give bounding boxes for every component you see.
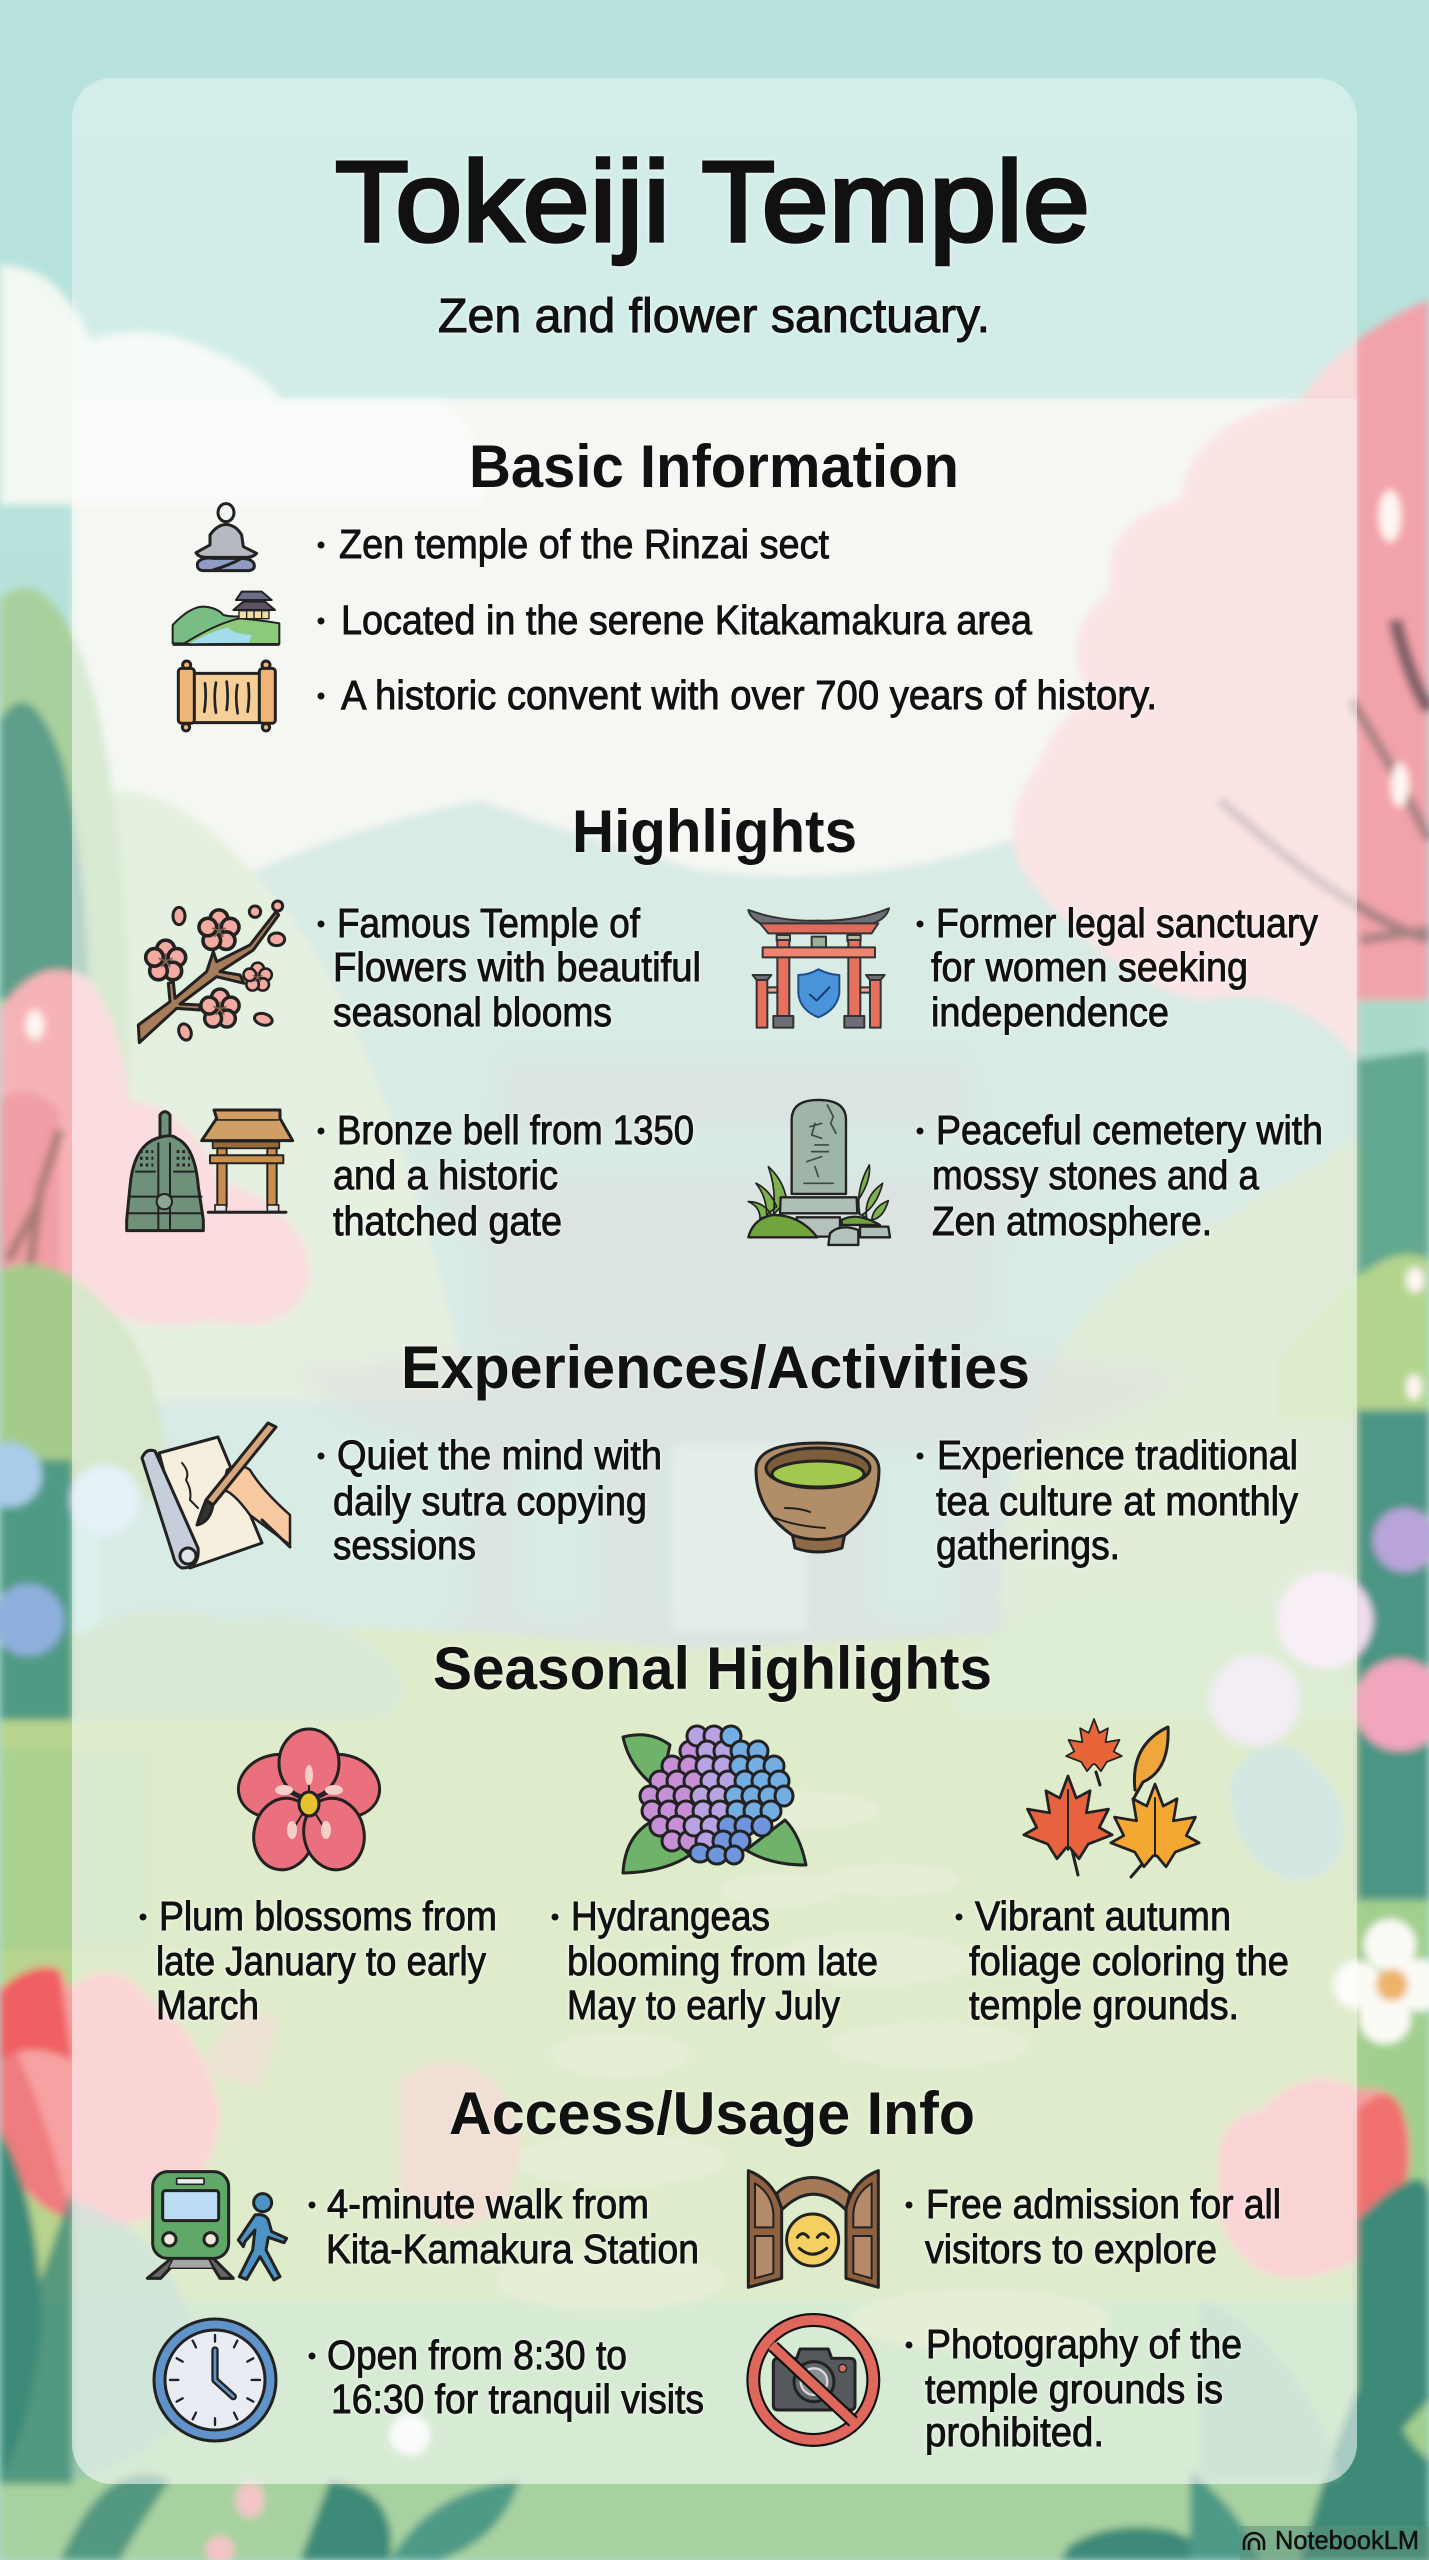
text: plum blossoms: late January to early (156, 1938, 486, 1984)
section: seasonal highlights (140, 1635, 1289, 2028)
icon: mossy gravestone (748, 1100, 890, 1245)
text: hydrangeas: Hydrangeas (571, 1893, 770, 1939)
text: autumn foliage: Vibrant autumn (975, 1893, 1231, 1939)
heading: access and usage info: Access/Usage Info (449, 2080, 975, 2147)
text: legal sanctuary: Former legal sanctuary (936, 900, 1318, 946)
heading: seasonal highlights: Seasonal Highlights (433, 1635, 992, 1702)
misty sky below the seam (72, 399, 1357, 1000)
text: temple of flowers: Famous Temple of (337, 900, 641, 946)
text: basic information bullets (318, 521, 1157, 718)
text: autumn foliage: foliage coloring the (969, 1938, 1289, 1984)
text: peaceful cemetery: mossy stones and a (932, 1152, 1259, 1198)
text: opening hours: 16:30 for tranquil visits (331, 2376, 704, 2422)
icon: hydrangea (623, 1726, 806, 1873)
text: free admission (906, 2181, 1281, 2272)
text: autumn foliage: temple grounds. (969, 1982, 1239, 2028)
pink blush inside panel (400, 2062, 520, 2226)
text: sutra copying: sessions (333, 1522, 476, 1568)
text: opening hours: Open from 8:30 to (327, 2332, 627, 2378)
icon: torii gate with shield (748, 908, 889, 1028)
icon: autumn leaves (1024, 1719, 1199, 1877)
text: walk from station: Kita-Kamakura Station (326, 2226, 699, 2272)
icon: plum blossom (231, 1729, 387, 1875)
section: highlights (127, 798, 1323, 1245)
text: sutra copying: daily sutra copying (333, 1478, 647, 1524)
text: free admission: visitors to explore (925, 2226, 1217, 2272)
heading: highlights: Highlights (572, 798, 857, 865)
left mountain (72, 790, 470, 1400)
subtitle: Zen and flower sanctuary. (438, 290, 990, 343)
text: bronze bell: Bronze bell from 1350 (337, 1107, 694, 1153)
low hedges (72, 1609, 403, 1720)
white flower right (1334, 1919, 1429, 2044)
text: plum blossoms (140, 1893, 497, 2028)
text: plum blossoms: Plum blossoms from (159, 1893, 497, 1939)
text: photography prohibited: Photography of the (926, 2321, 1242, 2367)
text: hydrangeas: May to early July (567, 1982, 840, 2028)
text: plum blossoms: March (156, 1982, 259, 2028)
pink lily right (1218, 2079, 1410, 2278)
text: basic information bullets: Located in the serene Kitakamakura area (341, 597, 1032, 643)
stepping stones (495, 1792, 1110, 2350)
text: temple of flowers: Flowers with beautiful (333, 944, 701, 990)
left clouds (0, 265, 485, 505)
text: photography prohibited: temple grounds is (925, 2366, 1223, 2412)
text: walk from station (308, 2181, 699, 2272)
text: autumn foliage (956, 1893, 1289, 2028)
text: basic information bullets: Zen temple of the Rinzai sect (339, 521, 830, 567)
text: basic information bullets: A historic convent with over 700 years of history. (341, 672, 1157, 718)
icon: landscape with temple (173, 592, 279, 645)
ground (0, 1627, 1429, 2560)
bottom leaves (0, 2130, 1429, 2560)
NotebookLM watermark: NotebookLM (1275, 2525, 1419, 2555)
text: bronze bell: and a historic (333, 1152, 558, 1198)
icon: open doors with smile (748, 2171, 878, 2287)
text: sutra copying (318, 1432, 662, 1568)
text: sutra copying: Quiet the mind with (337, 1432, 662, 1478)
icon: train and walker (147, 2172, 287, 2280)
text: walk from station: 4-minute walk from (327, 2181, 649, 2227)
section: access and usage info (147, 2080, 1281, 2455)
heading: basic information: Basic Information (469, 433, 959, 500)
icon: sutra copying hand and brush (142, 1423, 290, 1568)
text: opening hours (308, 2332, 704, 2422)
section: basic information (173, 433, 1157, 731)
icon: meditating figure (196, 504, 257, 571)
text: bronze bell: thatched gate (333, 1198, 562, 1244)
text: peaceful cemetery: Peaceful cemetery with (936, 1107, 1323, 1153)
text: tea culture: gatherings. (936, 1522, 1120, 1568)
text: photography prohibited (906, 2321, 1242, 2455)
icon: no photography (753, 2320, 873, 2440)
text: peaceful cemetery: Zen atmosphere. (932, 1198, 1212, 1244)
petals and specks (26, 490, 1424, 1400)
text: legal sanctuary (916, 900, 1318, 1035)
left cherry blossoms (0, 970, 310, 1330)
text: tea culture (916, 1432, 1298, 1568)
icon: scroll (178, 661, 275, 731)
text: peaceful cemetery (916, 1107, 1323, 1244)
icon: bronze bell and thatched gate (127, 1110, 293, 1231)
right bushes (998, 1090, 1429, 1700)
text: tea culture: tea culture at monthly (936, 1478, 1298, 1524)
pink lily left (0, 1966, 220, 2227)
text: bronze bell (318, 1107, 694, 1244)
text: hydrangeas (552, 1893, 878, 2028)
text: free admission: Free admission for all (926, 2181, 1281, 2227)
text: photography prohibited: prohibited. (925, 2409, 1104, 2455)
text: temple of flowers: seasonal blooms (333, 989, 612, 1035)
icon: tea bowl (756, 1443, 879, 1552)
text: legal sanctuary: independence (931, 989, 1169, 1035)
text: legal sanctuary: for women seeking (931, 944, 1248, 990)
left greenery (0, 1264, 165, 1500)
temple silhouette (290, 1060, 1185, 1660)
text: tea culture: Experience traditional (937, 1432, 1298, 1478)
text: temple of flowers (318, 900, 701, 1035)
right cherry tree (1012, 300, 1429, 1060)
icon: cherry branch (138, 901, 285, 1043)
right greenery (1357, 1000, 1429, 1430)
title: Tokeiji Temple (335, 139, 1090, 266)
far mountain (100, 800, 1357, 1700)
heading: experiences and activities: Experiences/Activities (401, 1334, 1030, 1401)
icon: clock (154, 2319, 276, 2441)
section: experiences (142, 1334, 1298, 1568)
text: hydrangeas: blooming from late (567, 1938, 878, 1984)
